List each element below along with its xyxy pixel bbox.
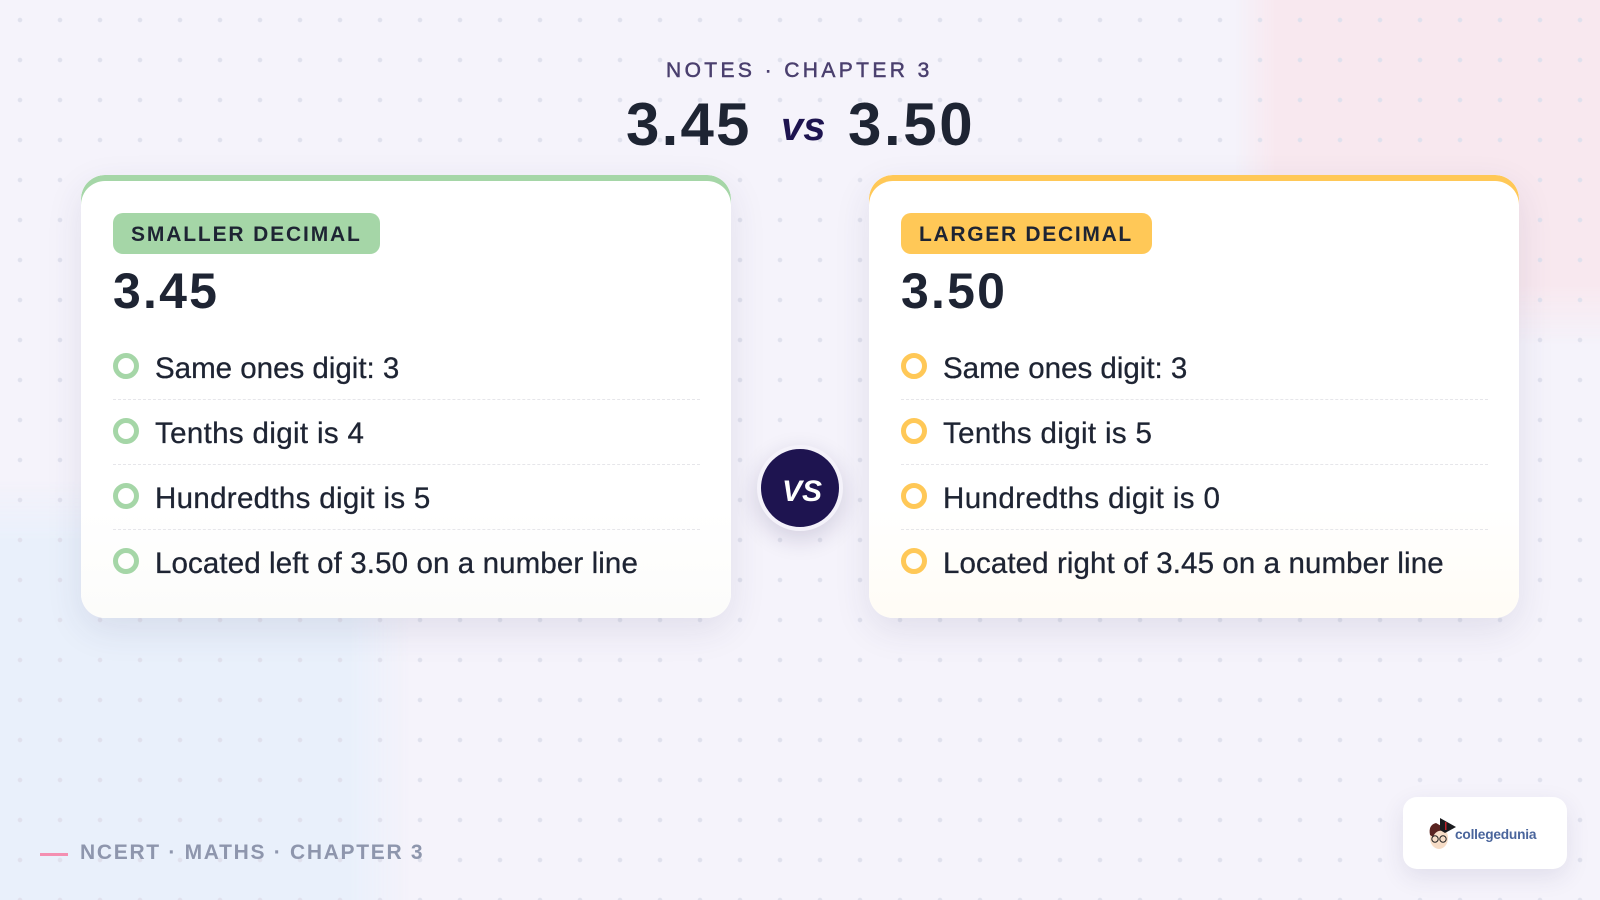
background pink blob [1264, 0, 1600, 302]
badge: larger decimal [901, 213, 1152, 254]
footer accent line [40, 853, 68, 856]
title right number: 3.50 [848, 91, 975, 158]
list item: Hundredths digit is 0 [943, 482, 1220, 515]
logo wordmark: collegedunia [1455, 827, 1536, 842]
list item: Located left of 3.50 on a number line [155, 547, 638, 580]
vs badge [757, 445, 843, 531]
background blue blob [0, 522, 368, 900]
badge: smaller decimal [113, 213, 380, 254]
list item: Hundredths digit is 5 [155, 482, 431, 515]
panel: smaller decimal [81, 175, 731, 618]
panel: larger decimal [869, 175, 1519, 618]
footer text: NCERT · MATHS · CHAPTER 3 [80, 841, 424, 864]
title vs: vs [781, 105, 826, 149]
value 3.45: 3.45 [113, 263, 219, 319]
logo card [1403, 797, 1567, 869]
value 3.50: 3.50 [901, 263, 1007, 319]
list item: Tenths digit is 5 [943, 417, 1152, 450]
list item: Same ones digit: 3 [943, 352, 1187, 385]
title left number: 3.45 [626, 91, 752, 158]
badge: larger decimal: LARGER DECIMAL [919, 223, 1133, 246]
list item: Located right of 3.45 on a number line [943, 547, 1444, 580]
icon: graduate head [1430, 818, 1456, 849]
list item: Same ones digit: 3 [155, 352, 399, 385]
badge: smaller decimal: SMALLER DECIMAL [131, 223, 362, 246]
footer label [40, 841, 424, 864]
vs badge: VS [782, 475, 822, 508]
title [626, 91, 975, 158]
eyebrow heading: NOTES · CHAPTER 3 [666, 59, 933, 82]
list item: Tenths digit is 4 [155, 417, 364, 450]
